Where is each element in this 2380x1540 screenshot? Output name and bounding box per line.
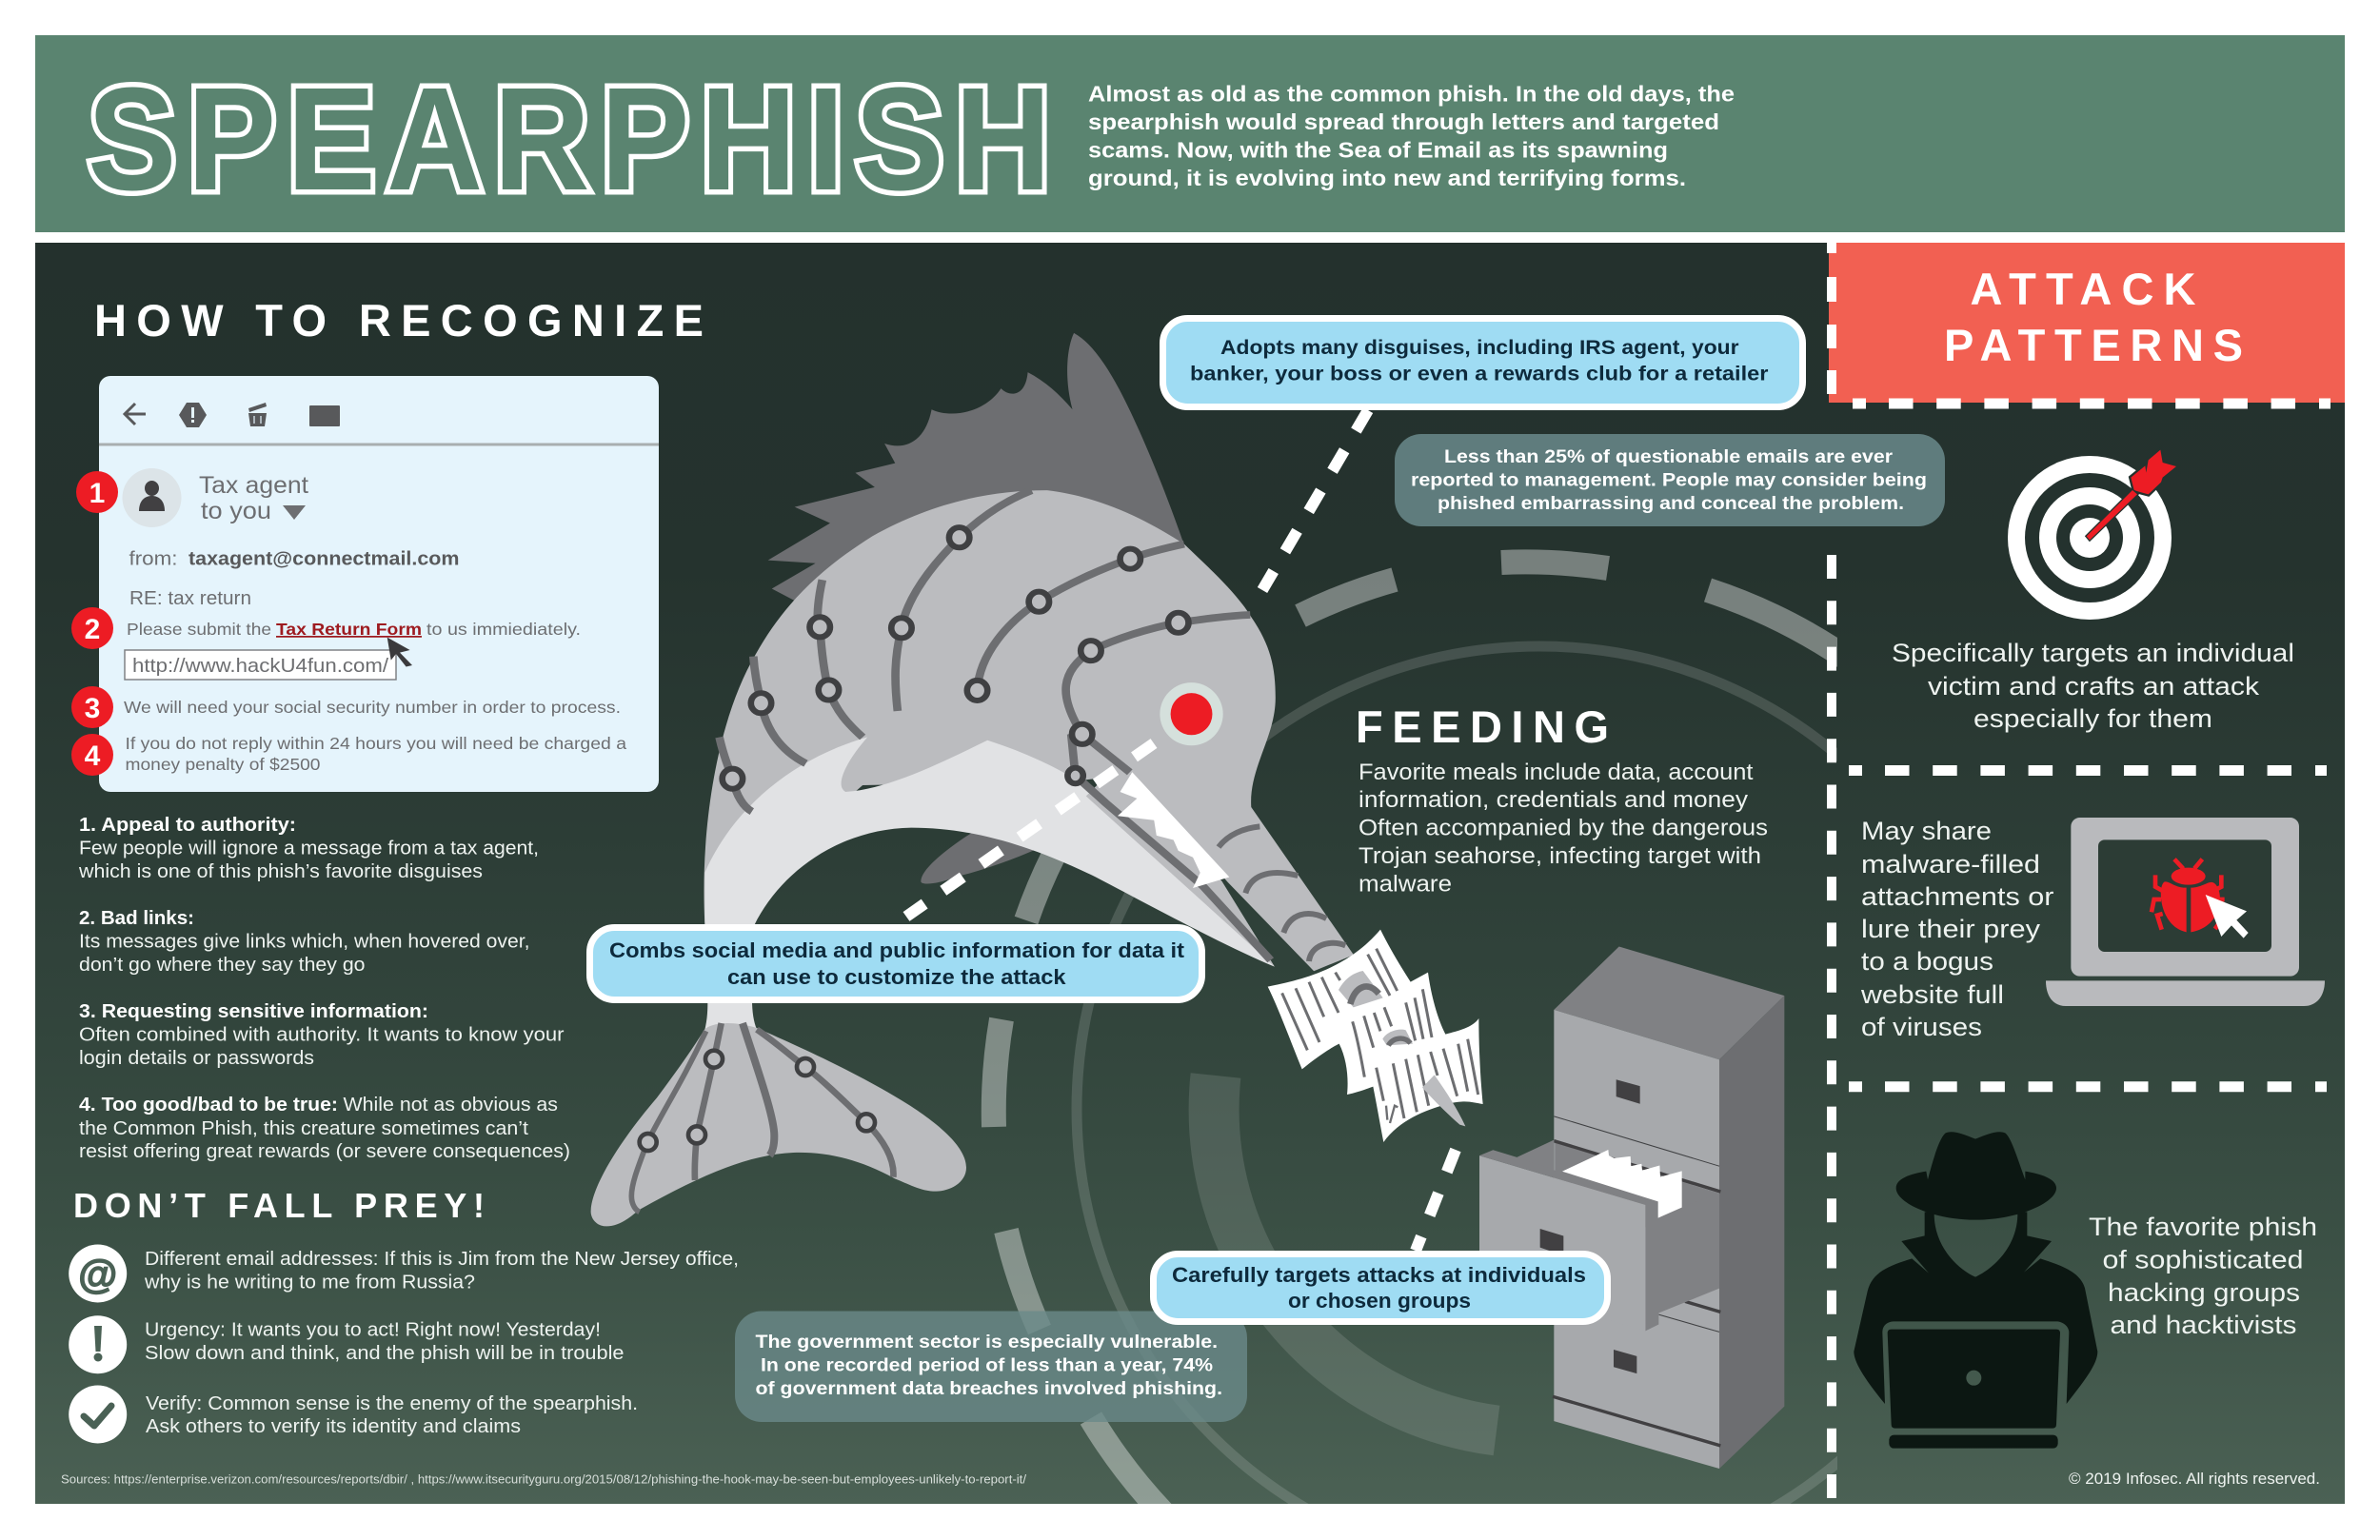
callout: social media [590, 927, 1201, 999]
text: targeting: especially for them [1973, 704, 2212, 733]
dashed connector lines [906, 410, 1456, 1251]
text block: prevention tips: Verify: Common sense is the enemy of the spearphish. [146, 1393, 638, 1414]
text: hackers: The favorite phish [2089, 1213, 2317, 1241]
text block: recognition tips: 2. Bad links: [79, 908, 194, 929]
intro text: spearphish would spread through letters and targeted [1088, 109, 1719, 134]
illustration: shredded papers [1268, 930, 1483, 1142]
text block: prevention tips: Urgency: It wants you to act! Right now! Yesterday! [145, 1319, 601, 1340]
text block: prevention tips: Different email addresses: If this is Jim from the New Jersey office, [145, 1249, 739, 1270]
email body lines: We will need your social security number in order to process. [124, 698, 621, 717]
text block: prevention tips: Ask others to verify its identity and claims [146, 1416, 521, 1437]
intro text: ground, it is evolving into new and terrifying forms. [1088, 166, 1686, 190]
text: hackers: of sophisticated [2102, 1245, 2304, 1273]
text block: prevention tips [144, 1249, 739, 1437]
body line with link [127, 620, 581, 639]
red number badges: 4 [85, 740, 101, 772]
from address: from: [129, 548, 177, 569]
callout: social media: can use to customize the attack [727, 965, 1066, 989]
text: malware: to a bogus [1861, 947, 1993, 976]
text: hackers: hacking groups [2108, 1278, 2300, 1307]
text block: recognition tips: Few people will ignore a message from a tax agent, [79, 838, 539, 859]
text block: recognition tips: 4. Too good/bad to be true: [79, 1095, 338, 1116]
body rays [720, 490, 1271, 960]
link preview [125, 650, 396, 680]
text block: feeding: information, credentials and money [1359, 787, 1748, 813]
text: hackers [2089, 1213, 2317, 1339]
text block: feeding: Often accompanied by the dangerous [1359, 815, 1768, 841]
icon: laptop with bug [2046, 818, 2325, 1006]
heading: how to recognize: HOW TO RECOGNIZE [94, 295, 704, 346]
ray joints [723, 527, 1188, 789]
callout: disguises [1163, 318, 1803, 407]
text: malware: attachments or [1861, 882, 2054, 911]
icon: at sign [69, 1245, 127, 1302]
body line with link: Please submit the [127, 620, 271, 639]
email body lines [124, 698, 626, 774]
icon: at sign: @ [78, 1252, 117, 1296]
callout: social media: Combs social media and public information for data it [609, 938, 1185, 962]
sender name: Tax agent [199, 472, 308, 499]
text block: recognition tips: Often combined with authority. It wants to know your [79, 1024, 565, 1045]
text: malware: malware-filled [1861, 850, 2040, 879]
text block: feeding: malware [1359, 872, 1452, 897]
callout: disguises: banker, your boss or even a rewards club for a retailer [1190, 362, 1769, 385]
text: targeting: Specifically targets an individual [1892, 639, 2294, 667]
heading: attack patterns: PATTERNS [1944, 320, 2243, 370]
teeth [1118, 772, 1229, 888]
icon: back arrow [125, 404, 146, 424]
text block: recognition tips: 3. Requesting sensitive information: [79, 1001, 428, 1022]
heading: don't fall prey: DON’T FALL PREY! [73, 1186, 485, 1225]
belly and lower jaw [704, 738, 1275, 967]
illustration: filing cabinet [1479, 946, 1784, 1469]
sources: Sources: https://enterprise.verizon.com/resources/reports/dbir/ , https://www.itsecurityguru.org/2015/08/12/phishing-the-hook-may-be-seen-but-employees-unlikely-to-report-it/ [61, 1473, 1027, 1487]
callout: government statistic: In one recorded period of less than a year, 74% [761, 1355, 1213, 1376]
intro text [1088, 82, 1735, 190]
text: targeting [1892, 639, 2294, 733]
subject: RE: tax return [129, 588, 251, 609]
heading: attack patterns: ATTACK [1971, 264, 2196, 314]
text: targeting: victim and crafts an attack [1928, 672, 2260, 701]
illustration: snout rings [1219, 826, 1345, 961]
icon: mail [309, 405, 340, 426]
from address: taxagent@connectmail.com [188, 548, 459, 569]
red number badges [71, 471, 118, 776]
icon: sender avatar [122, 468, 181, 527]
sender name [199, 472, 308, 524]
email body lines: money penalty of $2500 [126, 755, 321, 774]
text block: recognition tips: login details or passwords [79, 1048, 314, 1069]
heading: attack patterns [1829, 243, 2345, 403]
intro text: scams. Now, with the Sea of Email as its spawning [1088, 137, 1668, 162]
text block: recognition tips: Its messages give links which, when hovered over, [79, 931, 529, 952]
pectoral fin [921, 831, 1038, 883]
callout: reporting statistic [1395, 434, 1945, 526]
callout: disguises: Adopts many disguises, including IRS agent, your [1220, 336, 1739, 359]
icon: trash [248, 403, 267, 426]
mouse cursor [387, 638, 412, 666]
sender name: to you [201, 498, 271, 524]
text block: feeding [1356, 701, 1768, 897]
illustration: sailfish body [704, 333, 1354, 971]
text block: feeding: Favorite meals include data, account [1359, 760, 1754, 785]
callout: government statistic: of government data breaches involved phishing. [756, 1378, 1222, 1399]
panel: main dark background [35, 243, 2345, 1504]
text: malware: lure their prey [1861, 915, 2041, 943]
text block: recognition tips: 1. Appeal to authority: [79, 815, 296, 836]
text: malware [1860, 817, 2054, 1041]
callout: reporting statistic: phished embarrassing and conceal the problem. [1438, 494, 1904, 514]
text: malware: of viruses [1861, 1013, 1982, 1041]
icon: spam warning [179, 403, 207, 427]
callout: reporting statistic: Less than 25% of questionable emails are ever [1444, 447, 1894, 467]
link preview: http://www.hackU4fun.com/ [132, 656, 388, 677]
text block: recognition tips: don’t go where they say they go [79, 955, 366, 976]
illustration: fish tail [591, 999, 966, 1226]
panel: email mockup [99, 376, 659, 792]
body line with link: to us immiediately. [426, 620, 581, 639]
background sonar arcs [981, 549, 1837, 1504]
eye [1160, 682, 1223, 745]
icon: check mark [69, 1386, 127, 1443]
callout: reporting statistic: reported to management. People may consider being [1411, 470, 1927, 491]
text block: feeding: Trojan seahorse, infecting target with [1359, 843, 1761, 869]
dorsal fin [768, 333, 1184, 605]
title: SPEARPHISH [88, 58, 1051, 221]
text block: recognition tips: While not as obvious as [343, 1095, 558, 1116]
callout: targets: Carefully targets attacks at individuals [1172, 1263, 1586, 1287]
callout: government statistic: The government sector is especially vulnerable. [756, 1332, 1218, 1352]
body [704, 490, 1354, 971]
text: malware: website full [1860, 980, 2004, 1009]
callout: targets [1154, 1254, 1607, 1321]
text block: prevention tips: why is he writing to me from Russia? [144, 1272, 475, 1293]
text: malware: May share [1861, 817, 1992, 845]
text block: recognition tips: the Common Phish, this creature sometimes can’t [79, 1118, 528, 1139]
text: hackers: and hacktivists [2110, 1311, 2296, 1339]
red number badges: 3 [85, 693, 100, 724]
red number badges: 1 [89, 478, 105, 509]
text block: feeding: FEEDING [1356, 701, 1609, 752]
text block: recognition tips: resist offering great rewards (or severe consequences) [79, 1141, 570, 1162]
copyright: © 2019 Infosec. All rights reserved. [2069, 1471, 2320, 1488]
callout: government statistic [735, 1312, 1247, 1422]
callout: targets: or chosen groups [1288, 1289, 1471, 1313]
icon: exclamation [69, 1315, 127, 1373]
email body lines: If you do not reply within 24 hours you will need be charged a [126, 734, 626, 753]
intro text: Almost as old as the common phish. In the old days, the [1088, 82, 1735, 107]
red number badges: 2 [85, 614, 100, 645]
text block: recognition tips [78, 815, 570, 1162]
icon: target with dart [2008, 450, 2176, 620]
icon: hacker silhouette [1854, 1132, 2097, 1449]
text block: prevention tips: Slow down and think, and the phish will be in trouble [145, 1343, 625, 1364]
body line with link: Tax Return Form [276, 620, 422, 639]
panel: header banner [35, 35, 2345, 232]
text block: recognition tips: which is one of this phish’s favorite disguises [78, 861, 483, 882]
